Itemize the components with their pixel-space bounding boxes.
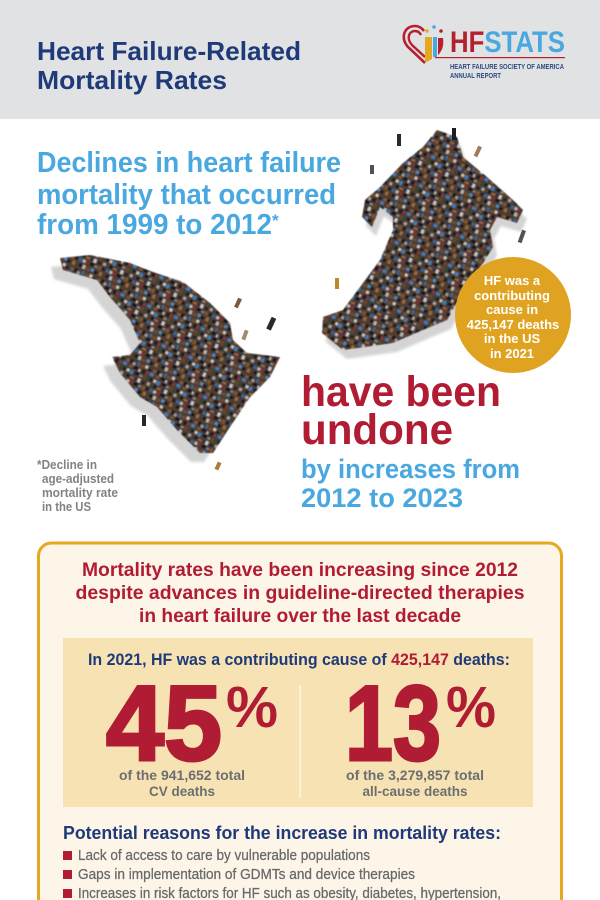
stat: 13 percent: of the 3,279,857 total bbox=[346, 767, 484, 783]
logo subtitle: HEART FAILURE SOCIETY OF AMERICA bbox=[450, 62, 564, 71]
subheading: increases: 2012 to 2023 bbox=[301, 483, 463, 513]
callout circle: in the US bbox=[484, 331, 540, 346]
stat: 45 percent: % bbox=[226, 675, 278, 740]
stat: 45 percent: 45 bbox=[106, 663, 222, 783]
panel: mortality rates card bbox=[38, 543, 562, 900]
callout circle: in 2021 bbox=[490, 346, 534, 361]
walking figures bbox=[335, 128, 526, 289]
heading: declines: mortality that occurred bbox=[37, 179, 336, 211]
stat: 45 percent: of the 941,652 total bbox=[119, 767, 245, 783]
reasons list bbox=[63, 848, 501, 900]
stat: 13 percent: all-cause deaths bbox=[362, 783, 468, 799]
callout circle: 425,147 deaths bbox=[467, 317, 559, 332]
logo wordmark: HFSTATS bbox=[450, 26, 565, 59]
icon: heart with figures bbox=[404, 25, 443, 63]
heading: have been undone: undone bbox=[301, 406, 453, 454]
footnote bbox=[37, 458, 118, 514]
footnote: mortality rate bbox=[42, 486, 118, 500]
logo: HFSTATS bbox=[404, 25, 565, 80]
reasons list: Gaps in implementation of GDMTs and device therapies bbox=[78, 867, 415, 883]
heading: have been undone bbox=[301, 368, 501, 454]
reasons heading: Potential reasons for the increase in mortality rates: bbox=[63, 822, 501, 843]
card heading: in heart failure over the last decade bbox=[139, 605, 461, 627]
footnote: *Decline in bbox=[37, 458, 97, 472]
reasons list: Lack of access to care by vulnerable populations bbox=[78, 848, 370, 864]
stat: 13 percent bbox=[345, 663, 496, 799]
header band bbox=[0, 0, 600, 119]
crowd arrow: up bbox=[322, 128, 527, 359]
card heading: Mortality rates have been increasing since 2012 bbox=[82, 559, 518, 581]
heading: declines bbox=[37, 147, 341, 241]
title: Heart Failure-Related bbox=[37, 36, 301, 66]
heading: declines: * bbox=[272, 211, 279, 230]
card heading bbox=[76, 559, 525, 627]
stat: 13 percent: % bbox=[446, 675, 496, 740]
heading: declines: from 1999 to 2012 bbox=[37, 209, 272, 241]
subheading: increases bbox=[301, 454, 520, 513]
walking figures bbox=[142, 298, 276, 470]
title: Mortality Rates bbox=[37, 65, 227, 95]
heading: have been undone: have been bbox=[301, 368, 501, 416]
footnote: in the US bbox=[42, 500, 91, 514]
heading: declines: Declines in heart failure bbox=[37, 147, 341, 179]
statistics heading: In 2021, HF was a contributing cause of 425,147 deaths: bbox=[88, 651, 510, 669]
subheading: increases: by increases from bbox=[301, 454, 520, 484]
callout circle: cause in bbox=[486, 302, 538, 317]
logo subtitle bbox=[450, 62, 564, 80]
crowd arrow: down bbox=[51, 255, 280, 470]
stat: 13 percent: 13 bbox=[345, 663, 441, 783]
stat: 45 percent bbox=[106, 663, 278, 799]
panel: statistics bbox=[63, 638, 533, 807]
callout circle: contributing bbox=[474, 288, 550, 303]
footnote: age-adjusted bbox=[42, 472, 114, 486]
callout circle: HF was a bbox=[484, 273, 541, 288]
card heading: despite advances in guideline-directed therapies bbox=[76, 582, 525, 604]
callout circle bbox=[455, 257, 571, 373]
stat: 45 percent: CV deaths bbox=[149, 783, 215, 799]
title bbox=[37, 36, 301, 95]
logo subtitle: ANNUAL REPORT bbox=[450, 71, 501, 80]
